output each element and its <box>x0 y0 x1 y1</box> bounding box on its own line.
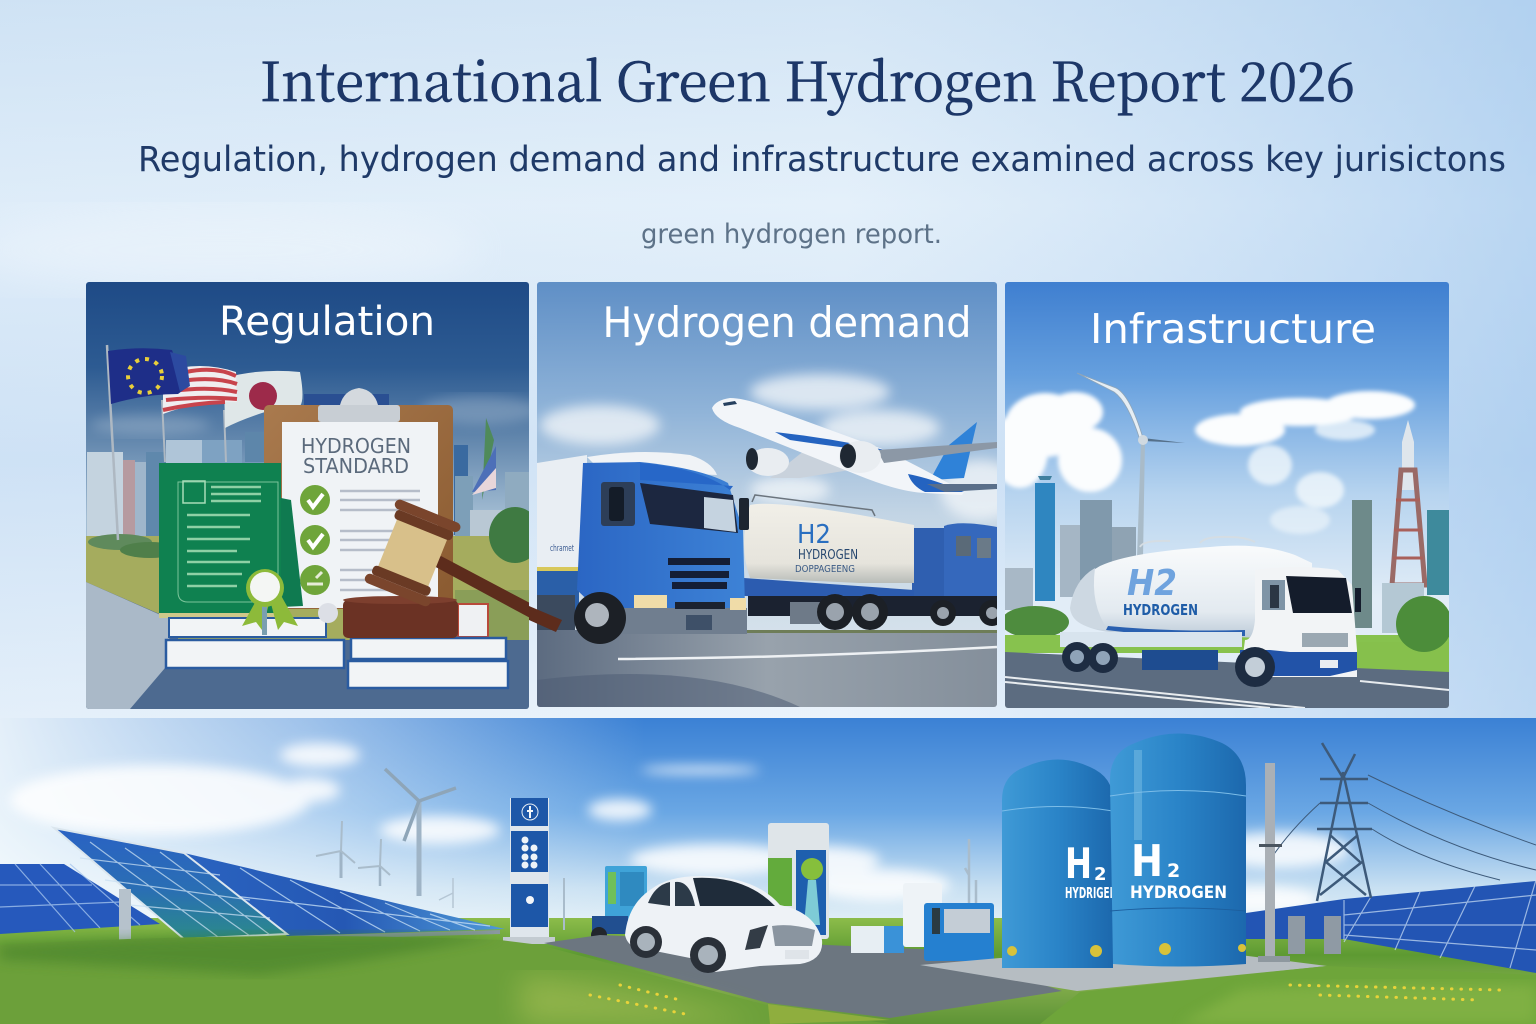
skyline <box>1005 420 1449 633</box>
city skyline <box>87 440 529 536</box>
storage tank right: 2 <box>1167 860 1180 882</box>
storage tank right: H <box>1131 836 1163 887</box>
tanker truck: H2 <box>1127 563 1177 604</box>
gavel <box>343 500 529 638</box>
panel: infrastructure <box>992 282 1452 708</box>
tanker truck <box>1060 537 1361 687</box>
solar array right <box>1246 880 1536 973</box>
concrete pad <box>920 955 1327 991</box>
bottom landscape <box>0 716 1536 1024</box>
clipboard: STANDARD <box>303 454 409 478</box>
clouds <box>992 391 1415 534</box>
storage tank left: H <box>1065 839 1092 888</box>
flags <box>107 345 496 540</box>
subtitle: Regulation, hydrogen demand and infrastructure examined across key jurisictons <box>138 140 1506 180</box>
title: International Green Hydrogen Report 2026 <box>260 40 1355 117</box>
storage tank right <box>1110 734 1246 966</box>
solar array left <box>0 826 505 940</box>
clouds <box>540 374 1020 520</box>
small barrels <box>1288 916 1341 954</box>
books <box>166 604 508 688</box>
fuel dispenser <box>768 823 829 939</box>
storage tank left <box>1002 760 1117 968</box>
airplane <box>712 398 997 495</box>
panel: regulation <box>86 282 562 709</box>
sky <box>0 716 1536 931</box>
ground and road <box>1001 596 1452 708</box>
foreground grass <box>0 934 1536 1024</box>
storage tank left: 2 <box>1094 864 1107 885</box>
field and trees <box>86 507 541 644</box>
station pole <box>503 798 555 944</box>
caption: green hydrogen report. <box>641 219 942 250</box>
heading: infrastructure: Infrastructure <box>1090 305 1376 353</box>
heading: regulation: Regulation <box>219 299 435 345</box>
pylon <box>1270 743 1536 901</box>
blue truck <box>537 452 749 644</box>
road <box>544 935 1062 1018</box>
clipboard: HYDROGEN <box>301 434 411 458</box>
panel: hydrogen demand <box>537 282 1020 707</box>
gavel handle overlap <box>529 606 562 632</box>
tanker truck: HYDROGEN <box>1123 601 1198 619</box>
ribbon seal <box>242 569 338 635</box>
small station kiosks <box>851 883 994 961</box>
rear tanker <box>744 495 1005 630</box>
white car <box>625 876 822 973</box>
vent stack <box>1258 763 1290 962</box>
blue truck: chramet <box>550 544 574 554</box>
road <box>86 582 529 709</box>
storage tank right: HYDROGEN <box>1130 883 1227 903</box>
clipboard <box>264 388 453 609</box>
rear tanker: H2 <box>797 520 831 550</box>
road <box>537 630 997 707</box>
small truck <box>591 866 647 943</box>
wind turbine <box>1077 373 1185 558</box>
horizon grass <box>0 918 1536 1024</box>
storage tank left: HYDRIGEN <box>1065 884 1117 902</box>
rear tanker: DOPPAGEENG <box>795 564 855 575</box>
green certificate <box>159 463 303 618</box>
heading: hydrogen demand: Hydrogen demand <box>602 298 972 347</box>
rear tanker: HYDROGEN <box>798 548 858 563</box>
turbines <box>316 769 976 930</box>
